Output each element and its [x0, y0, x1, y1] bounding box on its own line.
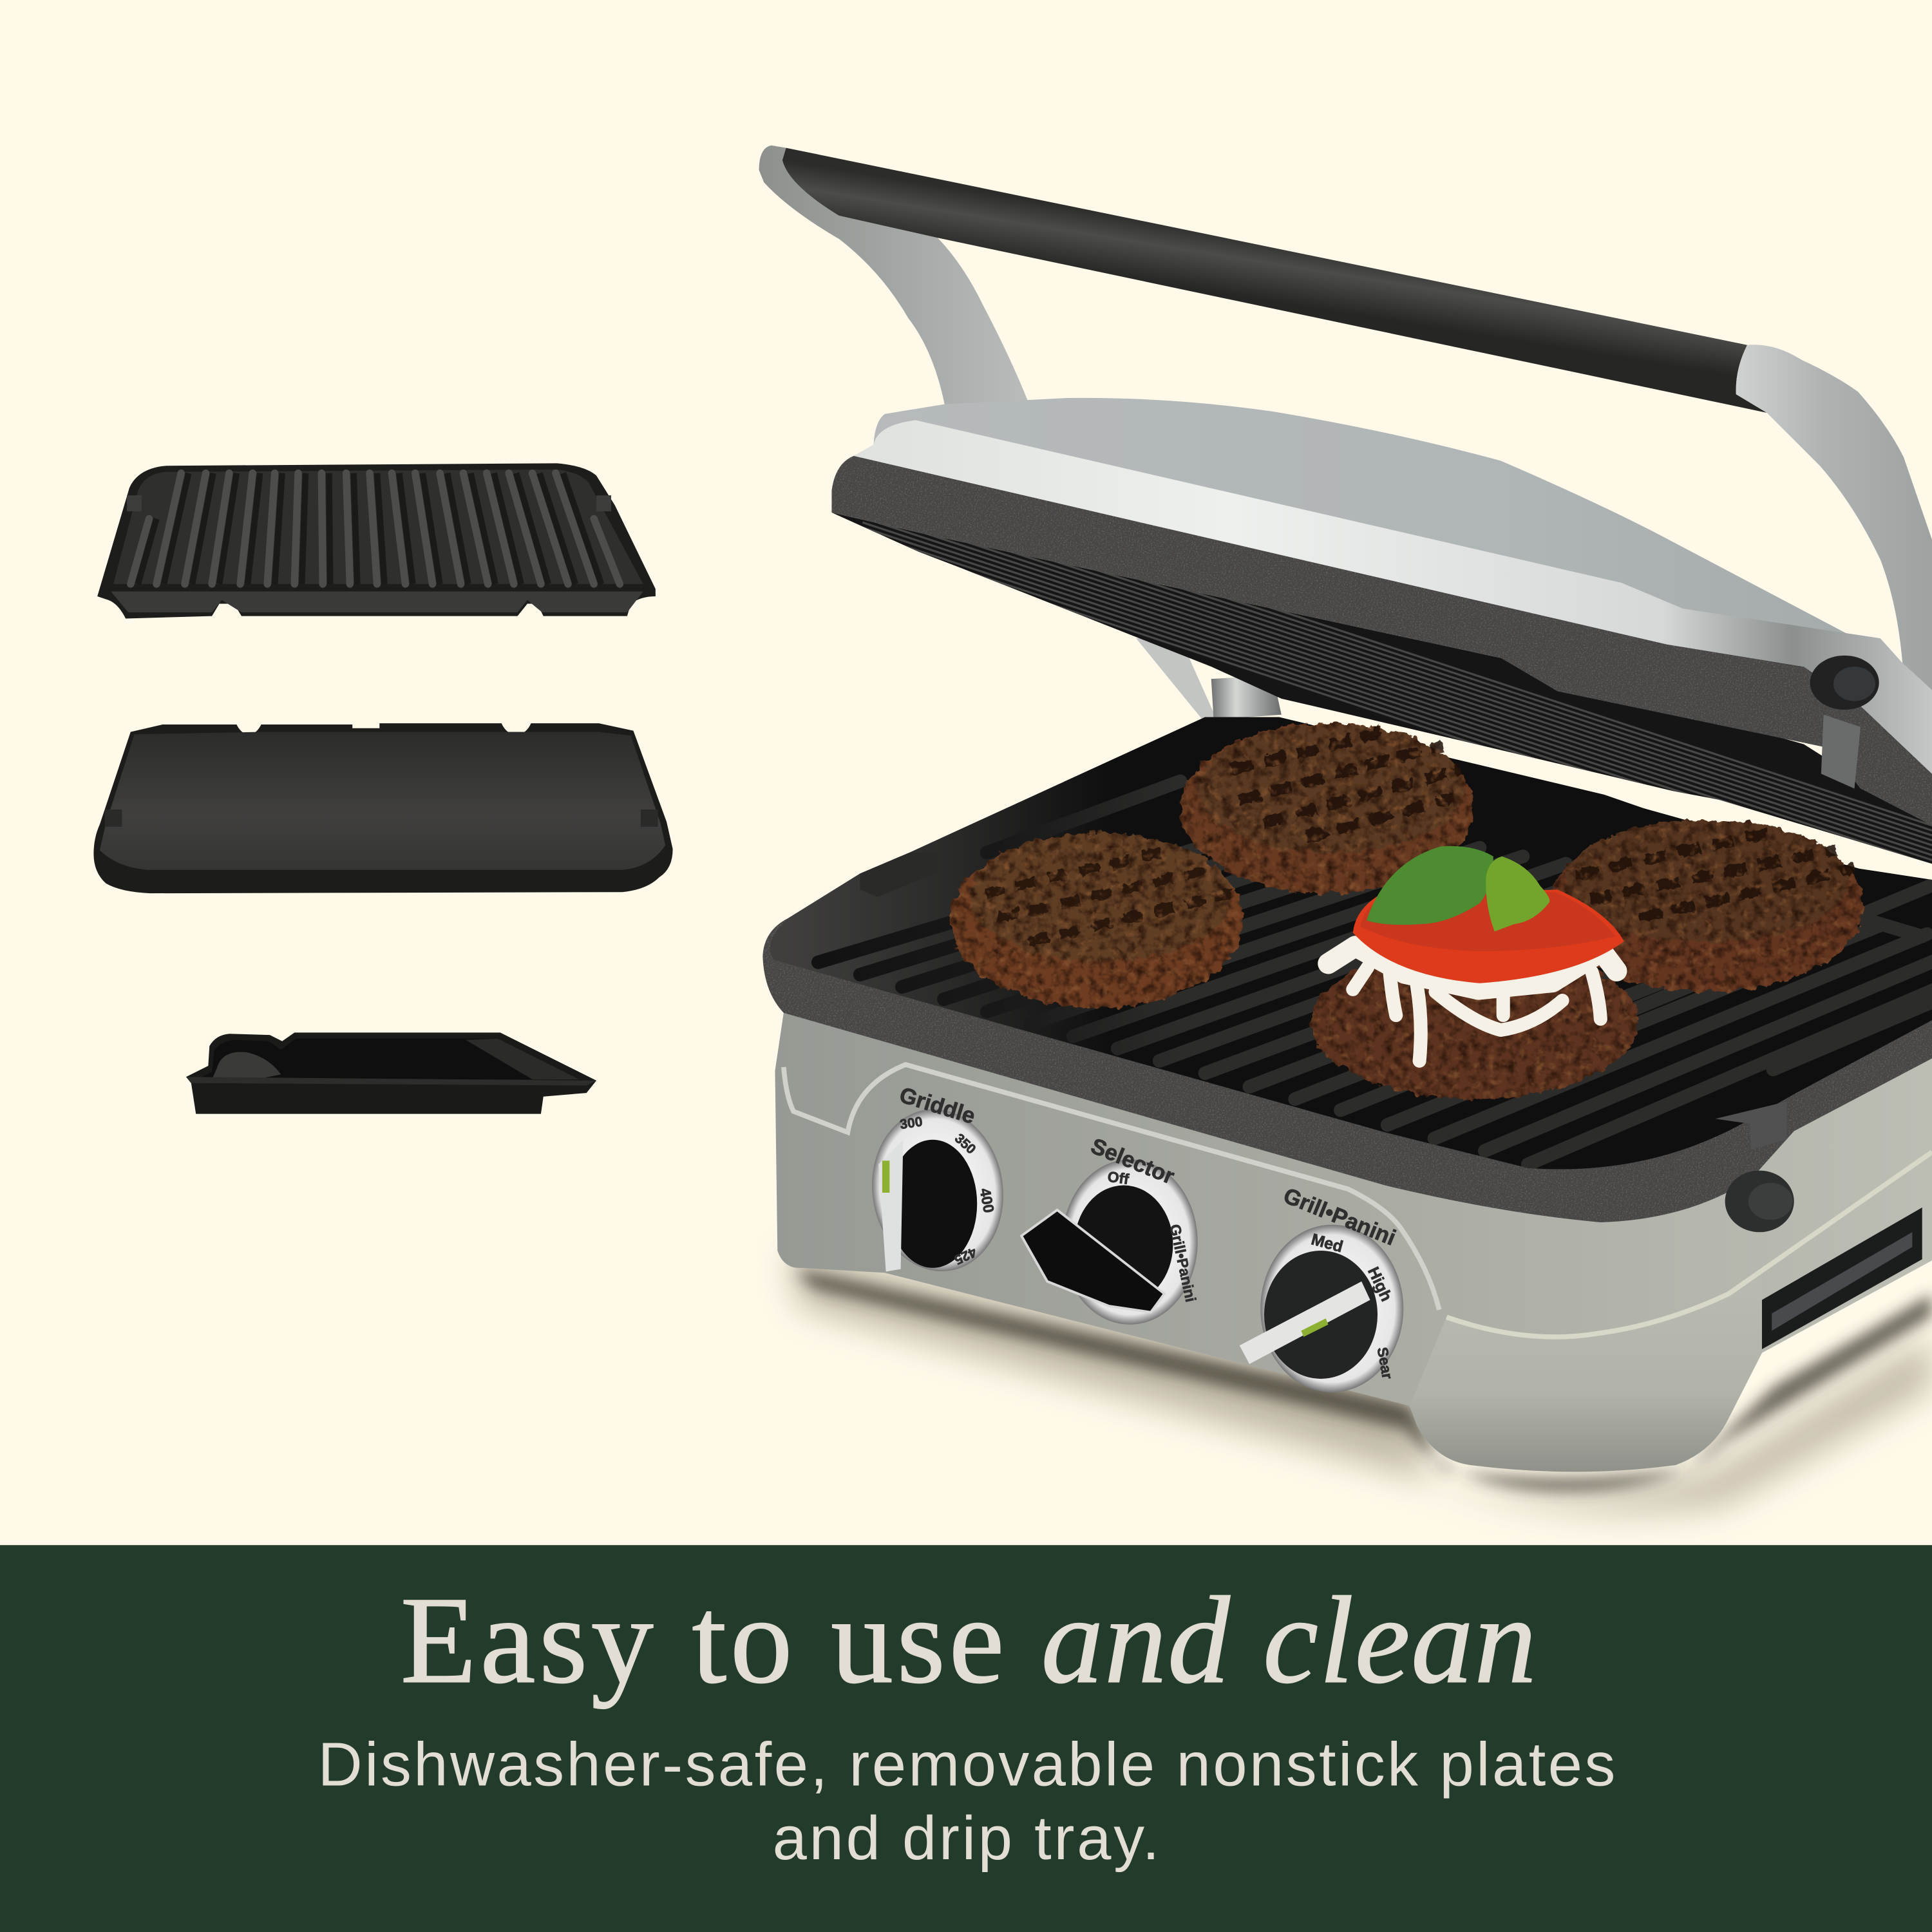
- left patty grill marks: [986, 850, 1232, 943]
- left hinge strut: [1136, 638, 1216, 718]
- plate inner surface: [113, 469, 643, 584]
- plate ribs: [131, 473, 620, 584]
- tray interior: [197, 1039, 579, 1079]
- hinge cylinder: [1211, 675, 1282, 719]
- cooking plate rim: [762, 717, 1932, 1222]
- lid highlight band: [854, 420, 1932, 774]
- grill panini label: Grill•Panini: [1280, 1184, 1399, 1251]
- back patty grill marks: [1232, 733, 1466, 838]
- contact shadow: [795, 1269, 1932, 1491]
- tray body: [186, 1032, 596, 1114]
- housing seam: [1446, 1152, 1932, 1337]
- control panel outline: [784, 1065, 1439, 1310]
- selector pointer: [1021, 1210, 1164, 1312]
- grill panini knob: [1264, 1251, 1378, 1379]
- griddle temp 300: 300: [899, 1114, 923, 1132]
- grill panini indicator: [1301, 1318, 1328, 1337]
- griddle pointer: [878, 1140, 903, 1271]
- basil leaf left: [1367, 846, 1493, 925]
- selector grill panini label: Grill•Panini: [1166, 1223, 1199, 1303]
- tray ramp: [466, 1039, 579, 1079]
- heading roman part: Easy to use: [401, 1571, 1004, 1709]
- left plate clip: [860, 853, 938, 897]
- grill: full appliance: [759, 146, 1932, 1511]
- base housing: [775, 1013, 1932, 1472]
- side release button: [1725, 1171, 1794, 1232]
- griddle dial: [862, 1083, 1014, 1280]
- griddle temp 400: 400: [977, 1187, 998, 1214]
- subtitle: [318, 1730, 1615, 1873]
- patty: back: [1180, 723, 1473, 893]
- tomato slice: [1353, 889, 1624, 983]
- mozzarella strands: [1353, 967, 1600, 1061]
- topped burger: [1311, 846, 1639, 1099]
- lid rim: [831, 456, 1932, 826]
- griddle temp 425: 425: [952, 1244, 979, 1267]
- griddle label: Griddle: [896, 1083, 978, 1129]
- tomato top face: [1360, 892, 1615, 951]
- griddle plate: flat removable plate: [93, 723, 673, 893]
- selector dial: [1021, 1134, 1199, 1325]
- griddle knob: [888, 1140, 977, 1268]
- grill panini ring: [1260, 1225, 1403, 1392]
- plate clip bracket: [1715, 1101, 1786, 1150]
- patty: left: [950, 833, 1243, 1008]
- banner background: [0, 1545, 1932, 1932]
- griddle temp 350: 350: [952, 1131, 978, 1157]
- griddle dial ring: [862, 1101, 1014, 1280]
- grill panini pointer: [1240, 1282, 1370, 1364]
- plate rib shadows: [138, 473, 601, 584]
- griddle rim: [93, 723, 673, 893]
- high label: High: [1364, 1264, 1396, 1304]
- left lid arm: [759, 146, 1028, 406]
- lid lock button: [1810, 656, 1879, 710]
- plate body: [97, 463, 656, 618]
- tray scoop: [212, 1052, 281, 1079]
- cooking plate ribs: [818, 781, 1932, 1164]
- drip tray: [186, 1032, 596, 1114]
- mozzarella top band: [1328, 946, 1616, 989]
- sear label: Sear: [1374, 1346, 1396, 1380]
- selector off label: Off: [1106, 1168, 1130, 1188]
- plate front edge: [111, 591, 643, 612]
- selector knob: [1074, 1186, 1173, 1303]
- background: [0, 0, 1932, 1545]
- subtitle line 2: and drip tray.: [773, 1804, 1159, 1873]
- lid hinge bracket: [1821, 715, 1861, 788]
- tray rim: [186, 1077, 596, 1086]
- drip tray slot: [1762, 1208, 1922, 1349]
- basil leaf right: [1486, 857, 1549, 931]
- right lid arm: [1736, 345, 1932, 773]
- cooking plate surface: [770, 717, 1932, 1170]
- griddle corner tabs: [105, 810, 658, 827]
- grill panini dial: [1240, 1184, 1403, 1392]
- griddle cooking surface: [100, 732, 665, 870]
- selector label: Selector: [1087, 1134, 1178, 1189]
- melted mozzarella: [1328, 946, 1616, 1061]
- patty: right: [1550, 819, 1863, 992]
- soft ground shadow: [788, 1251, 1932, 1511]
- med label: Med: [1309, 1230, 1345, 1256]
- griddle indicator: [882, 1160, 889, 1193]
- grill plate: ribbed removable plate: [97, 463, 656, 618]
- selector ring: [1062, 1159, 1198, 1325]
- burger patty: [1311, 946, 1639, 1099]
- banner: [0, 1545, 1932, 1932]
- handle bar: [782, 148, 1767, 413]
- lid underside ribs: [862, 522, 1932, 864]
- lid underside: [832, 513, 1932, 864]
- heading: [401, 1571, 1537, 1709]
- subtitle line 1: Dishwasher-safe, removable nonstick plates: [318, 1730, 1615, 1799]
- lower housing band: [1410, 1276, 1762, 1472]
- heading italic part: and clean: [1041, 1571, 1537, 1709]
- plate corner tabs: [127, 495, 611, 511]
- right patty grill marks: [1577, 831, 1854, 918]
- lid top: [854, 398, 1932, 774]
